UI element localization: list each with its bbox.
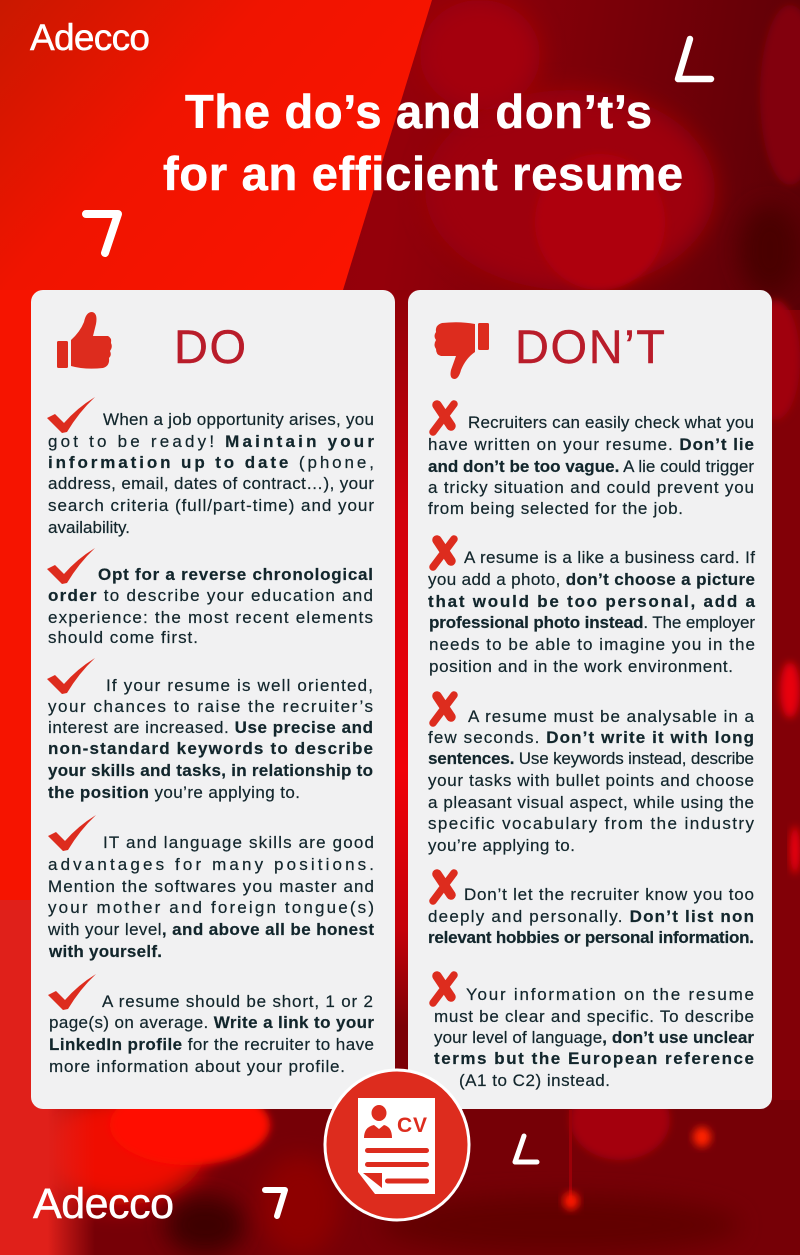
item: do 3: the position you’re applying to. (48, 783, 300, 802)
item: do 4: Mention the softwares you master and (48, 877, 374, 896)
title: for an efficient resume (163, 147, 683, 200)
item: do 5: A resume should be short, 1 or 2 (102, 992, 373, 1011)
item: don't 5: terms but the European reference (434, 1049, 754, 1068)
icon: document (358, 1098, 435, 1194)
item: don't 2: A resume is a like a business card. If (464, 548, 755, 567)
icon: thumbs up (57, 312, 112, 369)
item: don't 3 (428, 695, 755, 855)
item: don't 3: a pleasant visual aspect, while using the (428, 793, 754, 812)
item: don't 2 (428, 539, 756, 676)
item: don't 3: your tasks with bullet points and choose (428, 771, 754, 790)
item: do 3: non-standard keywords to describe (48, 739, 373, 758)
item: don't 2: professional photo instead. The employer (429, 613, 755, 632)
item: don't 2: position and in the work environment. (429, 657, 733, 676)
item: don't 4: deeply and personally. Don’t list non (428, 907, 754, 926)
item: don't 5: must be clear and specific. To describe (434, 1007, 754, 1026)
item: do 1: search criteria (full/part-time) and your (48, 496, 374, 515)
item: don't 1 (428, 404, 754, 518)
panel: don't (408, 290, 772, 1109)
item: don't 1: have written on your resume. Don’t lie (428, 435, 754, 454)
icon: decorative L top right (678, 39, 711, 79)
badge: cv document (325, 1070, 469, 1220)
item: do 4: your mother and foreign tongue(s) (48, 898, 374, 917)
item: don't 3: specific vocabulary from the industry (428, 814, 754, 833)
item: do 1: information up to date (phone, (48, 453, 374, 472)
item: do 1: availability. (48, 518, 130, 537)
item: do 3 (47, 658, 373, 802)
item: do 1: When a job opportunity arises, you (103, 410, 374, 429)
logo: Adecco top: Adecco (30, 17, 150, 58)
item: do 3: your chances to raise the recruiter’s (48, 697, 373, 716)
item: do 4: IT and language skills are good (103, 833, 374, 852)
item: do 5: more information about your profile. (49, 1057, 345, 1076)
item: don't 3: A resume must be analysable in a (468, 707, 755, 726)
item: do 1: got to be ready! Maintain your (48, 432, 374, 451)
item: do 5: page(s) on average. Write a link to your (49, 1013, 374, 1032)
item: do 2: order to describe your education and (48, 586, 373, 605)
icon: decorative L bottom (515, 1136, 537, 1162)
item: do 5 (48, 974, 374, 1076)
item: don't 2: needs to be able to imagine you in the (429, 635, 755, 654)
icon: decorative 7 bottom (265, 1190, 285, 1216)
heading: don't: DON’T (515, 320, 665, 373)
label: cv: CV (397, 1114, 427, 1137)
item: do 1 (47, 397, 374, 537)
item: do 5: LinkedIn profile for the recruiter to have (49, 1035, 374, 1054)
item: don't 1: and don’t be too vague. A lie could trigger (428, 457, 754, 476)
item: don't 2: that would be too personal, add a (428, 592, 756, 611)
item: don't 1: Recruiters can easily check what you (468, 413, 754, 432)
item: don't 2: you add a photo, don’t choose a picture (428, 570, 755, 589)
item: don't 5 (433, 975, 754, 1090)
item: don't 4: Don’t let the recruiter know you too (464, 885, 754, 904)
item: do 2: experience: the most recent elements (48, 608, 373, 627)
icon: person (364, 1105, 392, 1138)
item: do 2 (47, 548, 373, 647)
icon: thumbs down (434, 322, 489, 379)
item: do 4 (47, 815, 374, 961)
heading: do: DO (174, 320, 246, 373)
item: don't 5: (A1 to C2) instead. (459, 1071, 610, 1090)
item: don't 5: your level of language, don’t use unclear (434, 1028, 754, 1047)
item: don't 4: relevant hobbies or personal information. (428, 928, 754, 947)
item: don't 1: a tricky situation and could prevent you (428, 478, 754, 497)
item: don't 3: you’re applying to. (428, 836, 575, 855)
item: do 2: should come first. (48, 628, 198, 647)
item: do 3: your skills and tasks, in relationship to (48, 761, 373, 780)
item: do 4: with your level, and above all be honest (47, 920, 374, 939)
item: do 4: with yourself. (48, 942, 162, 961)
icon: decorative 7 top left (86, 214, 118, 253)
item: do 1: address, email, dates of contract…), your (48, 474, 374, 493)
item: do 3: If your resume is well oriented, (106, 676, 373, 695)
panel: do (31, 290, 395, 1109)
item: do 4: advantages for many positions. (48, 855, 374, 874)
logo: Adecco bottom: Adecco (33, 1180, 174, 1228)
title: The do’s and don’t’s (185, 85, 652, 138)
item: don't 3: sentences. Use keywords instead, describe (428, 749, 754, 768)
item: don't 3: few seconds. Don’t write it with long (428, 728, 754, 747)
item: do 3: interest are increased. Use precise and (48, 718, 373, 737)
item: don't 1: from being selected for the job. (428, 499, 683, 518)
item: do 2: Opt for a reverse chronological (98, 565, 373, 584)
title (163, 85, 683, 200)
icon: document lines (363, 1148, 429, 1188)
item: don't 4 (428, 873, 754, 947)
item: don't 5: Your information on the resume (466, 985, 754, 1004)
